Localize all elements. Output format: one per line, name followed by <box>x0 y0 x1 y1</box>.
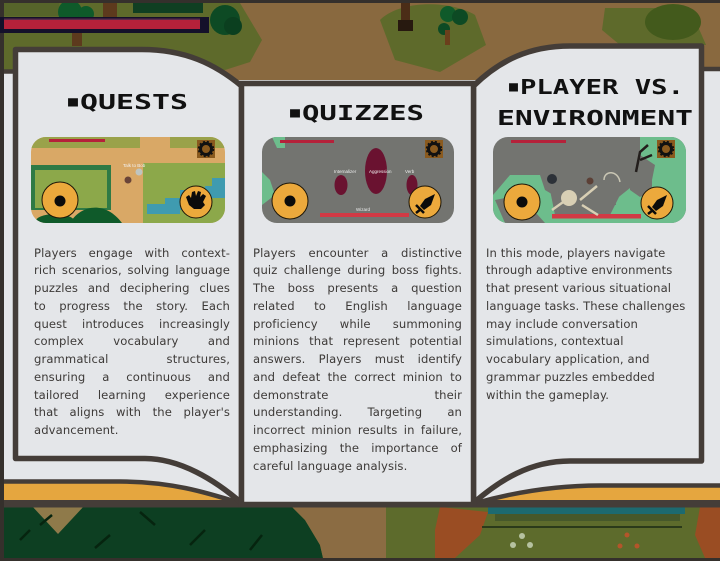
quests: joystick <box>42 182 78 218</box>
text block: quizzes description: related to English language <box>253 299 462 313</box>
heading: quests <box>68 90 188 114</box>
quests: hand button <box>180 186 212 218</box>
text block: player vs. environment description: within the gameplay. <box>486 388 609 402</box>
text block: player vs. environment description <box>486 246 685 402</box>
text block: quizzes description: minions that represent potential <box>253 334 462 348</box>
book: left page panel <box>16 50 242 503</box>
text block: player vs. environment description: that present various situational <box>486 281 671 295</box>
text block: quests description: tailored learning experience <box>34 388 230 402</box>
health bar <box>0 17 209 33</box>
heading: quizzes: ■ <box>290 105 301 121</box>
text block: quests description: rich scenarios, solving language <box>34 263 230 277</box>
text block: quests description: to progress the story. Each <box>34 299 230 313</box>
text block: quizzes description: demonstrate their <box>253 388 462 402</box>
text block: quests description: complex vocabulary and <box>34 334 230 348</box>
text block: quizzes description: quiz challenge during boss fights. <box>253 263 462 277</box>
quizzes: settings icon <box>425 140 443 158</box>
text block: quizzes description: The boss presents a question <box>253 281 462 295</box>
background: top game map <box>0 0 720 80</box>
pvp: sword button <box>641 187 673 219</box>
text block: quizzes description: proficiency while summoning <box>253 316 462 330</box>
text block: player vs. environment description: may include conversation <box>486 316 638 330</box>
heading: player vs. environment: PLAYER VS. <box>520 75 684 99</box>
text block: quizzes description: incorrect minion results in failure, <box>253 423 462 437</box>
heading: player vs. environment: ■ <box>509 79 519 95</box>
quizzes: sword button <box>409 186 441 218</box>
text block: quests description: grammatical structures, <box>34 352 230 366</box>
screenshot: quizzes: Verb <box>405 169 415 174</box>
screenshot: quests: Talk to Bob <box>123 163 146 168</box>
screenshot: quizzes: Aggression <box>369 169 392 174</box>
text block: quests description <box>34 246 230 437</box>
screenshot: quizzes: Internalizer <box>334 169 357 174</box>
text block: quests description: ensuring a continuous and <box>34 370 230 384</box>
text block: quests description: advancement. <box>34 423 118 437</box>
text block: quizzes description: Players encounter a distinctive <box>253 246 462 260</box>
text block: player vs. environment description: simulations, contextual <box>486 334 624 348</box>
text block: player vs. environment description: through adaptive environments <box>486 263 672 277</box>
text block: quizzes description: answers. Players must identify <box>253 352 462 366</box>
text block: player vs. environment description: In this mode, players navigate <box>486 246 665 260</box>
text block: player vs. environment description: grammar puzzles embedded <box>486 370 655 384</box>
text block: quizzes description: emphasizing the importance of <box>253 441 462 455</box>
text block: quests description: Players engage with context- <box>34 246 230 260</box>
heading: quizzes: QUIZZES <box>302 101 424 125</box>
quizzes: joystick <box>272 183 308 219</box>
heading: player vs. environment: ENVIRONMENT <box>497 106 693 130</box>
text block: quests description: that aligns with the player's <box>34 405 230 419</box>
text block: player vs. environment description: vocabulary application, and <box>486 352 650 366</box>
heading: quests: ■ <box>68 94 79 110</box>
text block: quizzes description: and defeat the correct minion to <box>253 370 462 384</box>
heading: quests: QUESTS <box>80 90 188 114</box>
text block: quests description: quest introduces increasingly <box>34 316 230 330</box>
background: bottom game map <box>0 505 720 561</box>
text block: quizzes description <box>252 246 462 472</box>
heading: quizzes <box>290 101 424 125</box>
screenshot: player vs. environment <box>493 137 686 223</box>
book: back pages <box>4 69 720 508</box>
text block: quests description: puzzles and deciphering clues <box>34 281 230 295</box>
text block: quizzes description: understanding. Targeting an <box>253 405 462 419</box>
quests: settings icon <box>197 140 215 158</box>
text block: player vs. environment description: language tasks. These challenges <box>486 299 685 313</box>
screenshot: quests <box>31 137 225 230</box>
pvp: joystick <box>504 184 540 220</box>
screenshot: quizzes <box>262 137 454 223</box>
screenshot: quizzes: Wizard <box>356 207 370 212</box>
text block: quizzes description: careful language analysis. <box>253 458 407 472</box>
book: right page panel <box>474 46 702 503</box>
pvp: settings icon <box>657 140 675 158</box>
heading: player vs. environment <box>497 75 693 130</box>
book: center page panel <box>242 84 474 504</box>
